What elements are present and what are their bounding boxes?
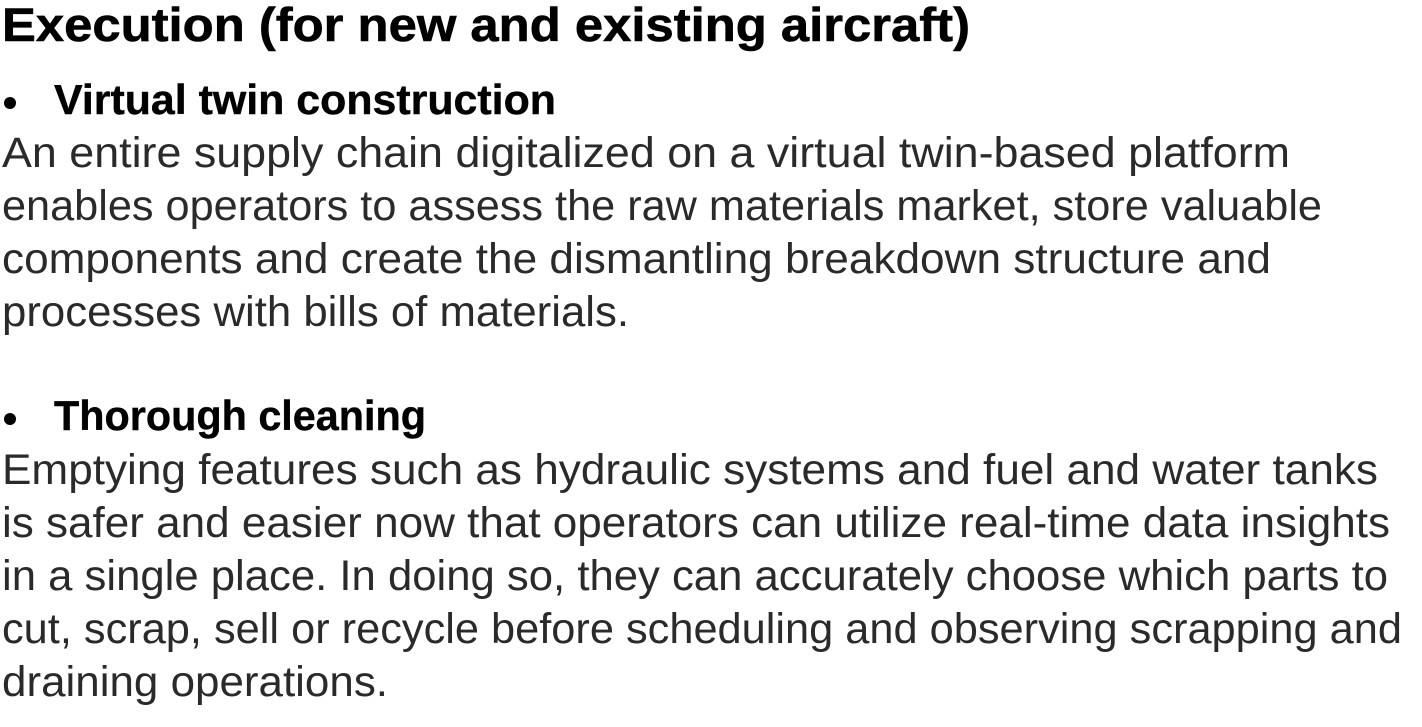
bullet: thorough cleaning <box>4 413 16 425</box>
section: virtual twin construction <box>2 76 1322 336</box>
section: thorough cleaning <box>2 392 1402 706</box>
text block: thorough cleaning description: cut, scrap, sell or recycle before scheduling and observing scrapping and <box>2 605 1402 653</box>
text block: virtual twin description: processes with bills of materials. <box>2 288 629 336</box>
text block: thorough cleaning description: draining operations. <box>2 658 388 706</box>
text block: virtual twin description: components and create the dismantling breakdown structure and <box>2 235 1271 283</box>
text block: virtual twin description: An entire supply chain digitalized on a virtual twin-based platform <box>2 129 1290 177</box>
text block: virtual twin description: enables operators to assess the raw materials market, store valuable <box>2 182 1322 230</box>
bullet: virtual twin construction <box>4 97 16 109</box>
text block: virtual twin description <box>2 129 1322 336</box>
text block: thorough cleaning description: in a single place. In doing so, they can accurately choose which parts to <box>2 552 1388 600</box>
text block: thorough cleaning description: Emptying features such as hydraulic systems and fuel and water tanks <box>2 446 1378 494</box>
subheading: thorough cleaning: Thorough cleaning <box>54 392 426 439</box>
text block: thorough cleaning description <box>2 446 1402 706</box>
subheading: virtual twin construction: Virtual twin construction <box>54 76 556 123</box>
text block: thorough cleaning description: is safer and easier now that operators can utilize real-time data insights <box>2 499 1390 547</box>
